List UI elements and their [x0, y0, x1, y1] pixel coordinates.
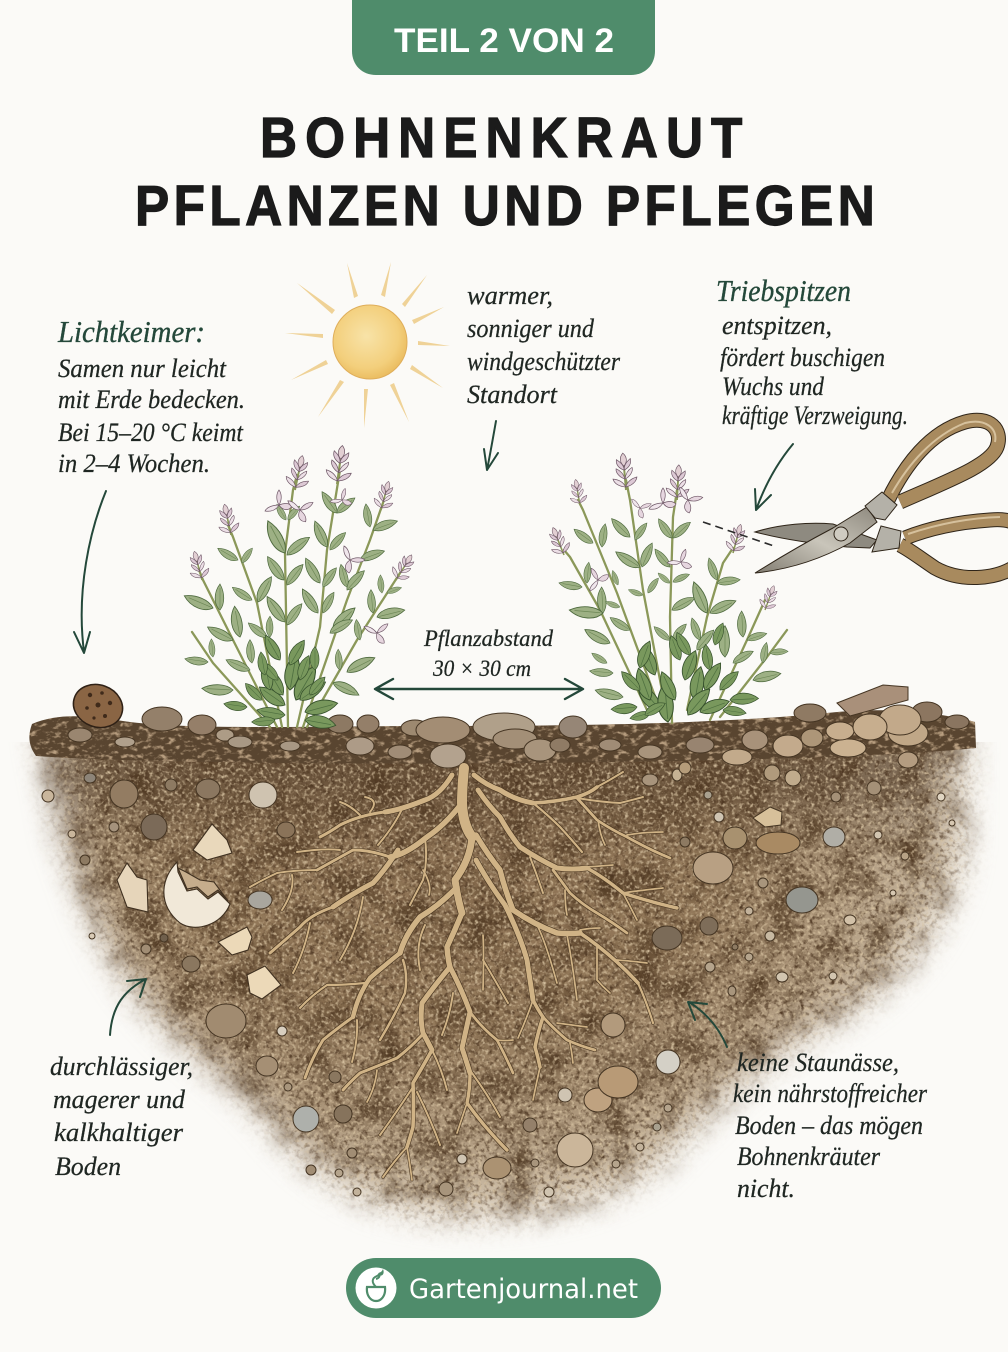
- text: planting distance: [423, 626, 553, 681]
- text: waterlogging note: Boden – das mögen: [735, 1111, 923, 1140]
- right pebbles: [642, 752, 955, 996]
- arrow: to no waterlogging note: [688, 1002, 727, 1047]
- text: pruning note: entspitzen,: [722, 311, 832, 340]
- soil pebbles: [42, 752, 955, 1197]
- title: PFLANZEN UND PFLEGEN: [135, 175, 875, 238]
- top banner: part label: [352, 0, 655, 75]
- handle: upper: [888, 420, 998, 502]
- plant: left savory: [182, 444, 420, 731]
- arrow: planting distance: [375, 679, 583, 699]
- text: location note: [467, 281, 621, 409]
- text: pruning note: Wuchs und: [722, 372, 825, 401]
- text: location note: windgeschützter: [467, 347, 621, 376]
- text: soil note: kalkhaltiger: [54, 1118, 184, 1147]
- arrow: to lean soil note: [110, 979, 146, 1035]
- handle: lower: [900, 517, 1008, 578]
- text: Lichtkeimer note: in 2–4 Wochen.: [58, 449, 210, 478]
- text: waterlogging note: nicht.: [737, 1174, 795, 1203]
- text: waterlogging note: keine Staunässe,: [737, 1048, 899, 1077]
- text: Lichtkeimer note: mit Erde bedecken.: [58, 385, 245, 414]
- icon: scissors: [755, 420, 1008, 578]
- arrow: to plants from location note: [484, 421, 498, 470]
- title: [135, 107, 875, 238]
- icon: seed: [67, 678, 129, 734]
- text: location note: sonniger und: [467, 314, 595, 343]
- text: soil note: durchlässiger,: [50, 1052, 193, 1081]
- icon: sun: [285, 262, 450, 428]
- footer pill: Gartenjournal.net: Gartenjournal.net: [409, 1274, 638, 1305]
- text: waterlogging note: Bohnenkräuter: [737, 1142, 881, 1171]
- arrow: to seed: [74, 491, 106, 653]
- arrow: to shoot tips: [755, 444, 793, 510]
- icon: pot with sprout: [356, 1268, 396, 1308]
- text: soil note: magerer und: [53, 1085, 186, 1114]
- text: pruning note: kräftige Verzweigung.: [722, 401, 908, 430]
- text: location note: warmer,: [467, 281, 553, 310]
- right branches: [474, 772, 677, 1100]
- taproot: [447, 768, 472, 967]
- text: soil note: [50, 1052, 193, 1181]
- text: pruning note: [716, 273, 908, 430]
- soil body: [45, 715, 960, 1212]
- text: planting distance: Pflanzabstand: [423, 626, 553, 651]
- text: Lichtkeimer note: Bei 15–20 °C keimt: [58, 418, 244, 447]
- blade: upper: [755, 523, 877, 548]
- text: waterlogging note: [733, 1048, 928, 1203]
- text: soil note: Boden: [55, 1152, 121, 1181]
- left pebbles: [42, 773, 295, 1038]
- title: BOHNENKRAUT: [260, 107, 742, 170]
- text: Lichtkeimer note: Lichtkeimer:: [57, 314, 205, 349]
- text: planting distance: 30 × 30 cm: [432, 656, 531, 681]
- dashed cut line: [703, 522, 774, 546]
- roots: [250, 768, 677, 1180]
- text: pruning note: Triebspitzen: [716, 273, 851, 308]
- text: pruning note: fördert buschigen: [720, 343, 885, 372]
- plant: right savory: [544, 452, 788, 723]
- surface stones: [68, 685, 969, 768]
- top banner: part label: TEIL 2 VON 2: [394, 22, 614, 60]
- top soil band with gravel: [29, 685, 976, 768]
- left branches: [250, 775, 462, 1078]
- eggshell pieces: [117, 824, 281, 999]
- text: location note: Standort: [467, 380, 558, 409]
- blade: lower: [755, 507, 877, 573]
- footer pill: Gartenjournal.net: [346, 1258, 661, 1318]
- ferrules and pivot: [834, 492, 901, 552]
- lower central branches: [343, 935, 513, 1180]
- text: Lichtkeimer note: [57, 314, 245, 478]
- lower pebbles: [256, 1013, 680, 1197]
- text: Lichtkeimer note: Samen nur leicht: [58, 354, 227, 383]
- text: waterlogging note: kein nährstoffreicher: [733, 1079, 928, 1108]
